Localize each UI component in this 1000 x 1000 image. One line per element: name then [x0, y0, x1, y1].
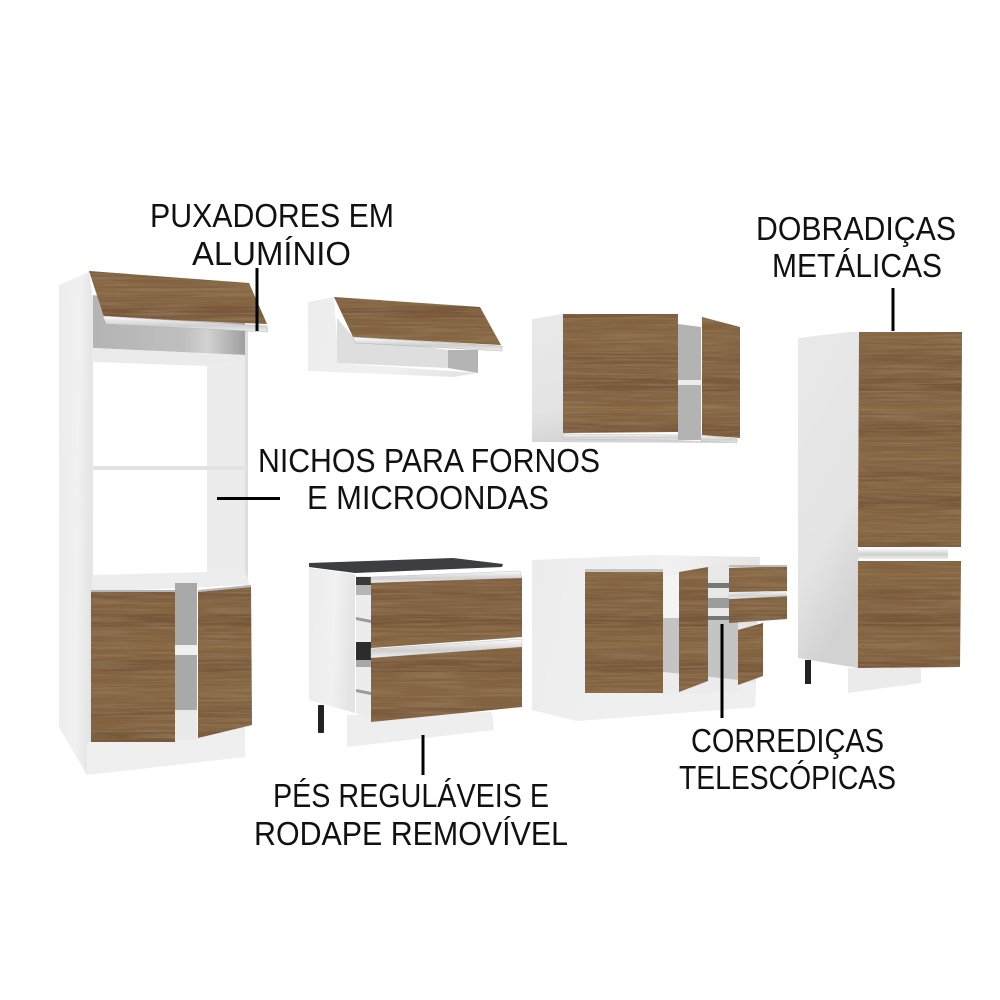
callout: pés reguláveis e rodape removível	[254, 735, 568, 852]
callout: pés reguláveis e rodape removível: RODAPE REMOVÍVEL	[254, 815, 568, 852]
flap door	[89, 271, 267, 324]
right door	[702, 317, 740, 438]
middle shelf	[93, 466, 246, 470]
left door	[585, 572, 663, 693]
side panel	[798, 332, 859, 668]
callout: corrediças telescópicas: CORREDIÇAS	[691, 722, 884, 759]
callout: corrediças telescópicas	[679, 624, 896, 796]
upper drawer	[371, 578, 522, 648]
interior recess	[93, 295, 245, 355]
left handle	[563, 434, 678, 440]
interior back	[337, 318, 448, 368]
upper drawer	[729, 566, 787, 592]
callout: corrediças telescópicas: TELESCÓPICAS	[679, 759, 896, 796]
upper door	[858, 332, 962, 547]
body	[532, 555, 760, 721]
left door	[563, 314, 678, 433]
plinth	[848, 668, 921, 693]
middle door	[679, 567, 708, 692]
cabinet: two-drawer base	[309, 558, 522, 747]
interior gap	[678, 324, 701, 440]
interior side	[448, 350, 478, 373]
plinth	[347, 712, 494, 747]
left lower door	[91, 592, 175, 742]
side panel	[308, 297, 478, 377]
flap handle	[353, 337, 502, 351]
cabinet: wall two-door unit	[532, 314, 740, 443]
cabinet: wall flap unit	[308, 297, 502, 377]
lower gap	[175, 583, 197, 740]
upper handle	[371, 571, 522, 583]
upper shelf	[93, 348, 245, 366]
lower handle	[371, 639, 522, 658]
callout: puxadores em alumínio: ALUMÍNIO	[192, 235, 351, 272]
right handle	[701, 435, 737, 443]
drawer opening	[356, 576, 371, 722]
lower right door	[738, 623, 763, 685]
callout: nichos para fornos e microondas: E MICROONDAS	[307, 479, 549, 516]
lower drawer	[729, 596, 787, 623]
side panel	[532, 314, 737, 443]
plinth	[87, 727, 245, 775]
cabinet: tall oven tower	[59, 271, 268, 775]
counter shelf	[91, 572, 250, 592]
lower drawer	[371, 647, 522, 722]
handle gap	[858, 548, 948, 559]
callout: pés reguláveis e rodape removível: PÉS REGULÁVEIS E	[273, 777, 549, 814]
interior	[663, 618, 738, 680]
callout: nichos para fornos e microondas: NICHOS PARA FORNOS	[258, 442, 600, 479]
lower door	[858, 561, 961, 668]
callout: dobradiças metálicas: METÁLICAS	[772, 247, 942, 284]
countertop	[309, 558, 503, 573]
leg	[805, 660, 811, 684]
cabinet: sink base	[532, 555, 787, 721]
callout: dobradiças metálicas	[756, 210, 956, 331]
side panel	[309, 568, 355, 713]
front plinth	[577, 682, 755, 721]
callout: puxadores em alumínio	[150, 197, 394, 331]
callout: puxadores em alumínio: PUXADORES EM	[150, 197, 394, 234]
callout: dobradiças metálicas: DOBRADIÇAS	[756, 210, 956, 247]
right lower door	[198, 587, 252, 738]
callout: nichos para fornos e microondas	[217, 442, 600, 516]
cabinet: tall fridge tower	[798, 332, 962, 693]
side panel	[59, 272, 93, 775]
leg	[318, 705, 324, 733]
flap handle	[103, 316, 268, 332]
inner right wall	[207, 360, 245, 572]
flap door	[334, 297, 501, 345]
